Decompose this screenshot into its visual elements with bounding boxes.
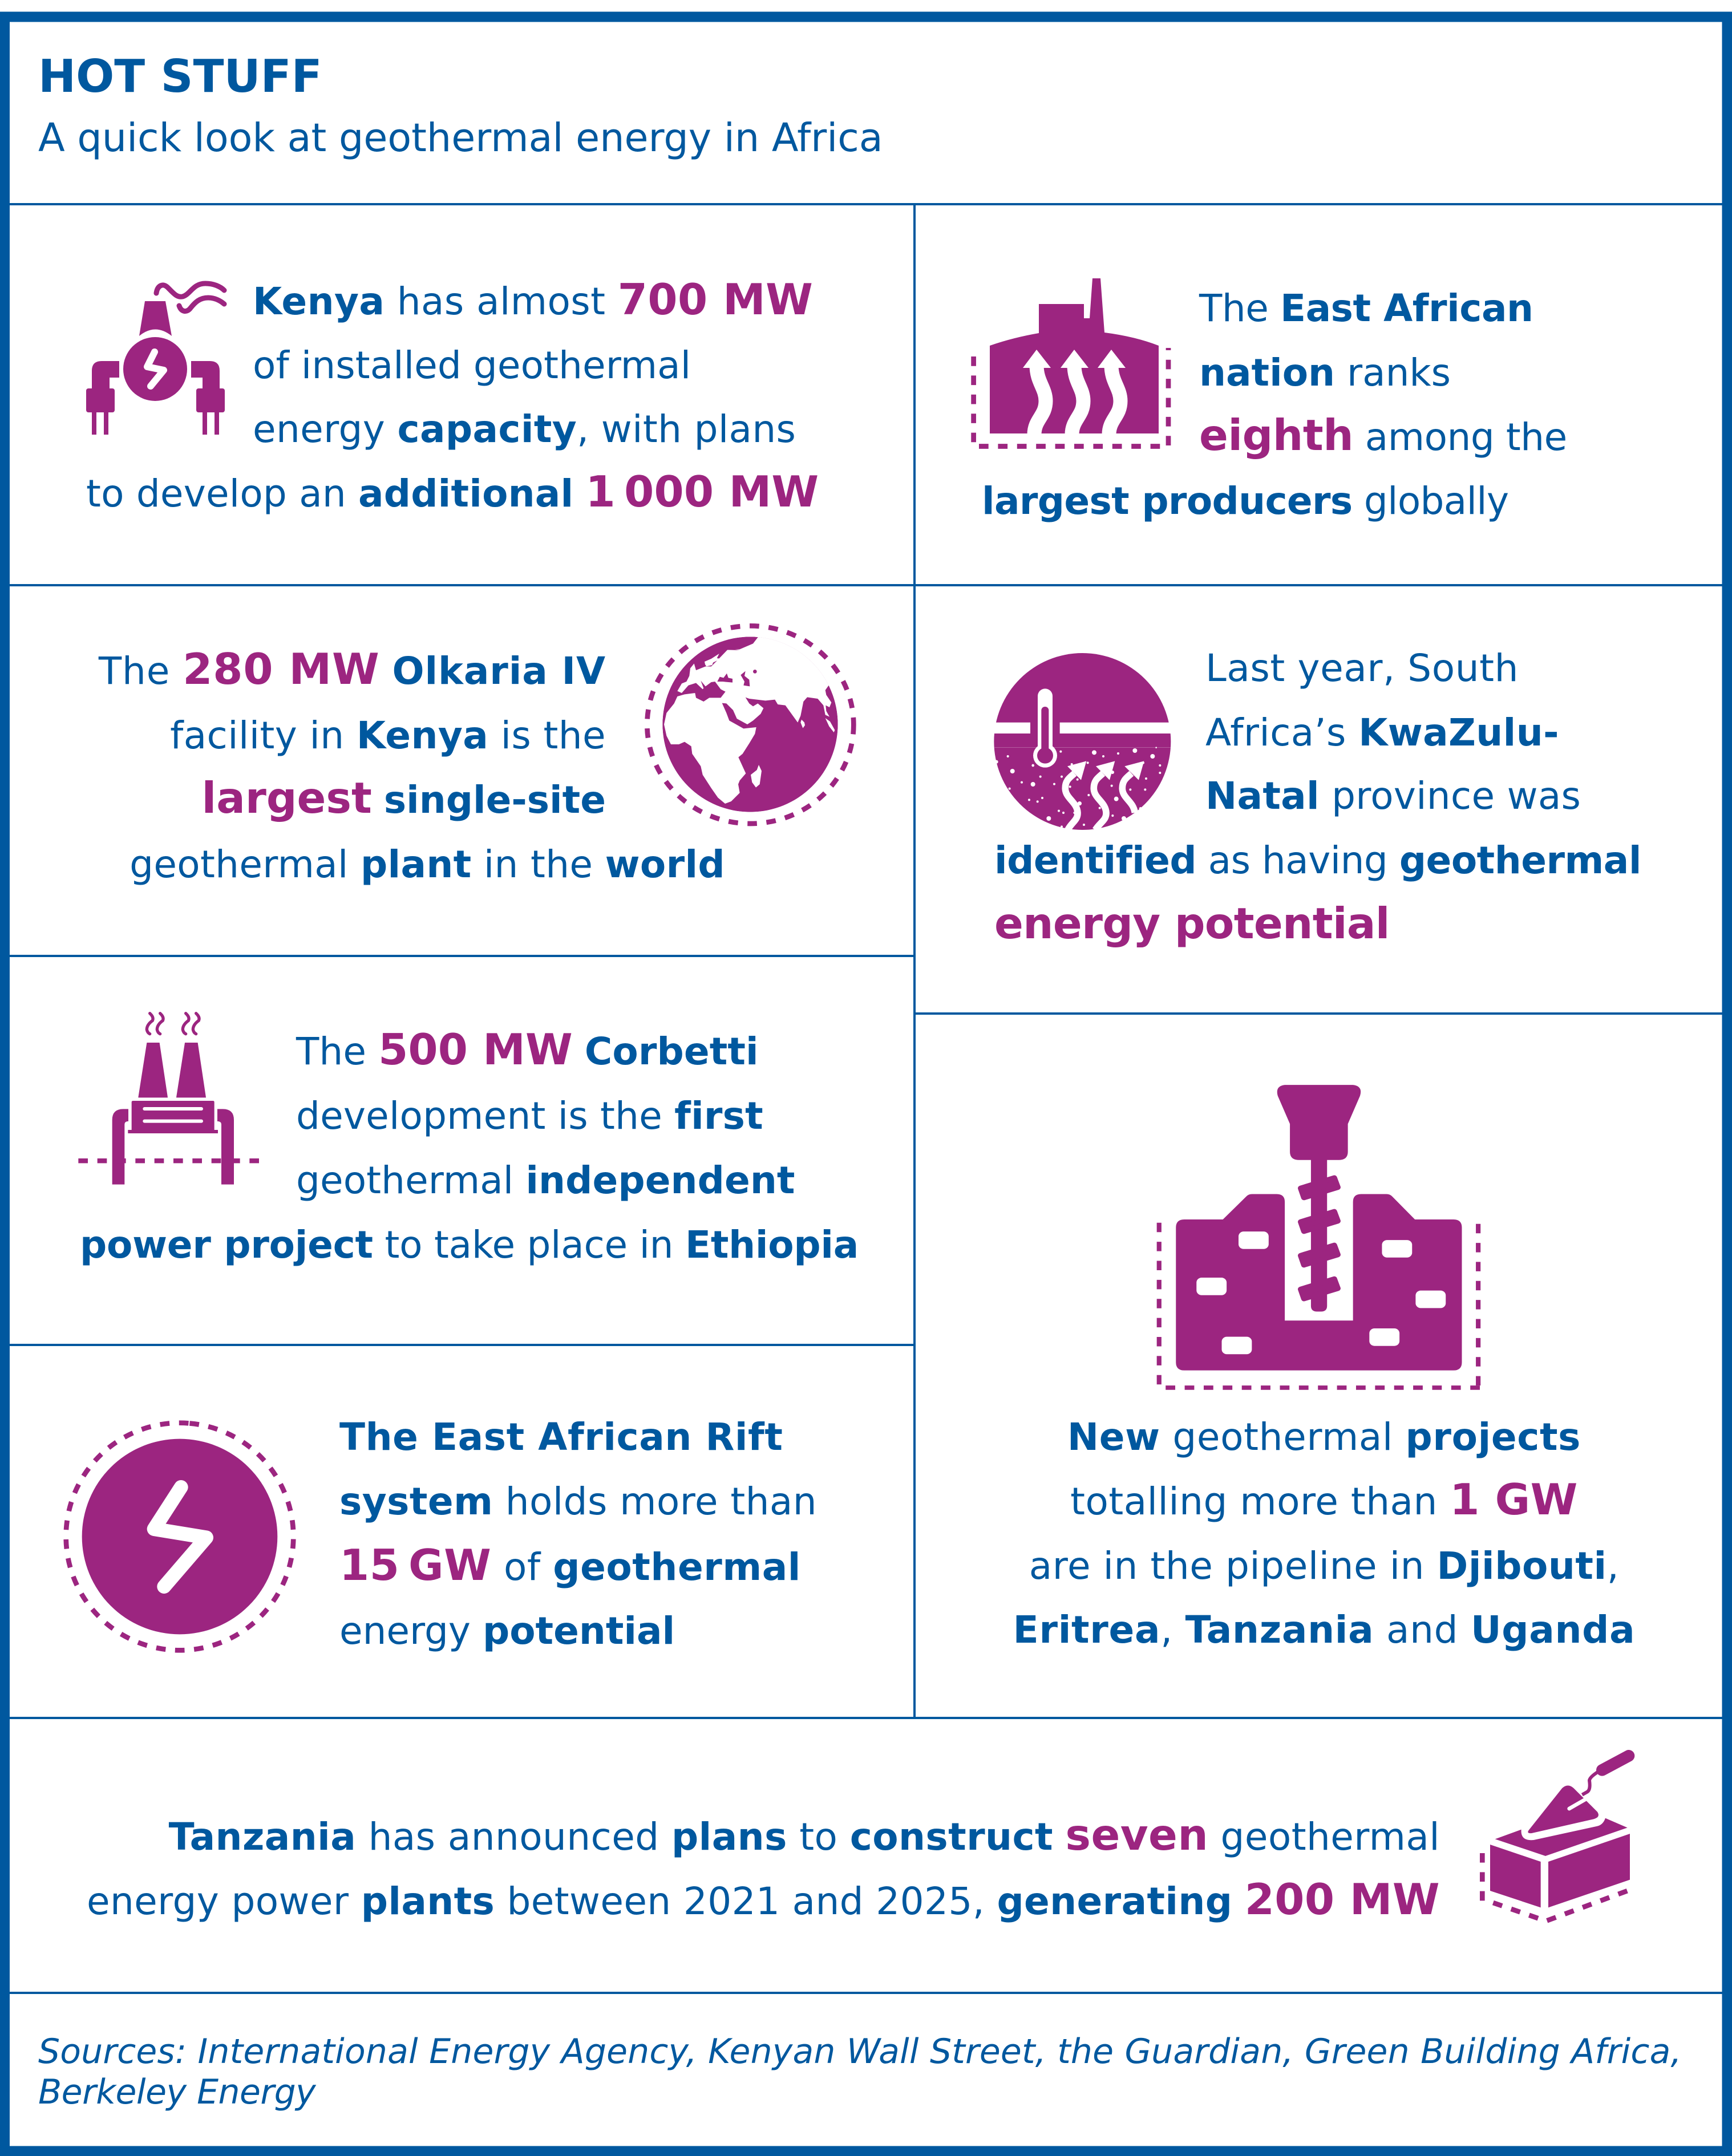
- text: Kenya capacity: of installed geothermal: [253, 343, 691, 387]
- panel: East African Rift: [56, 1413, 817, 1660]
- text: Tanzania: [87, 1810, 1440, 1924]
- text: KwaZulu-Natal: Natal province was: [1205, 774, 1581, 818]
- text: Kenya capacity: to develop an additional 1 000 MW: [86, 467, 819, 517]
- panel: Corbetti: [78, 1014, 859, 1267]
- text: new projects: totalling more than 1 GW: [1070, 1474, 1578, 1525]
- panel: East African nation ranking: [974, 278, 1567, 523]
- icon: lightning disc: [56, 1413, 303, 1660]
- sources: Berkeley Energy: [38, 2072, 317, 2112]
- text: Tanzania: energy power plants between 2021 and 2025, generating 200 MW: [87, 1874, 1440, 1924]
- text: Olkaria IV: The 280 MW Olkaria IV: [98, 644, 606, 694]
- text: new projects: [1013, 1415, 1635, 1652]
- text: East African Rift: [339, 1415, 817, 1653]
- title: HOT STUFF: [38, 50, 322, 103]
- text: East African nation: The East African: [1199, 286, 1533, 330]
- text: Kenya capacity: [86, 274, 819, 517]
- text: Corbetti: geothermal independent: [296, 1158, 795, 1202]
- header: [38, 50, 883, 161]
- text: KwaZulu-Natal: energy potential: [994, 898, 1390, 949]
- panel: Kenya capacity: [86, 274, 819, 517]
- sources: [38, 2032, 1682, 2112]
- text: Corbetti: development is the first: [296, 1094, 763, 1138]
- text: Tanzania: Tanzania has announced plans to construct seven geothermal: [169, 1810, 1440, 1860]
- text: East African nation: largest producers globally: [982, 479, 1508, 523]
- panel: KwaZulu-Natal: [993, 646, 1641, 949]
- text: KwaZulu-Natal: [994, 646, 1641, 949]
- sources: Sources: International Energy Agency, Kenyan Wall Street, the Guardian, Green Building Africa,: [38, 2032, 1682, 2072]
- panel: new projects: [1013, 1085, 1635, 1652]
- icon: globe: [647, 623, 853, 824]
- text: KwaZulu-Natal: Last year, South: [1205, 646, 1519, 690]
- text: Olkaria IV: largest single-site: [202, 773, 606, 823]
- subtitle: A quick look at geothermal energy in Africa: [38, 116, 883, 161]
- icon: power plant with plugs: [86, 283, 225, 435]
- text: new projects: New geothermal projects: [1067, 1415, 1581, 1459]
- icon: twin stack power plant: [78, 1014, 260, 1185]
- icon: geothermal factory: [974, 278, 1168, 446]
- text: East African Rift: The East African Rift: [339, 1415, 783, 1459]
- text: KwaZulu-Natal: identified as having geothermal: [994, 838, 1641, 882]
- text: KwaZulu-Natal: Africa’s KwaZulu-: [1205, 711, 1559, 755]
- text: Kenya capacity: Kenya has almost 700 MW: [253, 274, 813, 325]
- text: Olkaria IV: [98, 644, 725, 886]
- text: East African Rift: 15 GW of geothermal: [339, 1540, 801, 1590]
- icon: trowel and brick: [1482, 1756, 1630, 1920]
- panel: Tanzania: [87, 1756, 1630, 1924]
- text: East African nation: [982, 286, 1567, 523]
- panel: Olkaria IV: [98, 623, 853, 886]
- text: new projects: Eritrea, Tanzania and Uganda: [1013, 1608, 1635, 1652]
- text: Corbetti: The 500 MW Corbetti: [296, 1024, 759, 1075]
- icon: drill into ground: [1159, 1085, 1480, 1388]
- text: new projects: are in the pipeline in Djibouti,: [1029, 1544, 1619, 1588]
- text: East African Rift: system holds more than: [339, 1480, 817, 1523]
- text: East African nation: nation ranks: [1199, 351, 1451, 395]
- text: East African Rift: energy potential: [339, 1609, 675, 1653]
- text: Corbetti: [80, 1024, 859, 1267]
- text: Kenya capacity: energy capacity, with plans: [253, 407, 796, 451]
- text: Olkaria IV: facility in Kenya is the: [170, 714, 606, 757]
- text: Olkaria IV: geothermal plant in the world: [130, 842, 725, 886]
- icon: underground heat thermometer: [993, 653, 1174, 830]
- text: Corbetti: power project to take place in Ethiopia: [80, 1223, 859, 1267]
- text: East African nation: eighth among the: [1199, 410, 1567, 460]
